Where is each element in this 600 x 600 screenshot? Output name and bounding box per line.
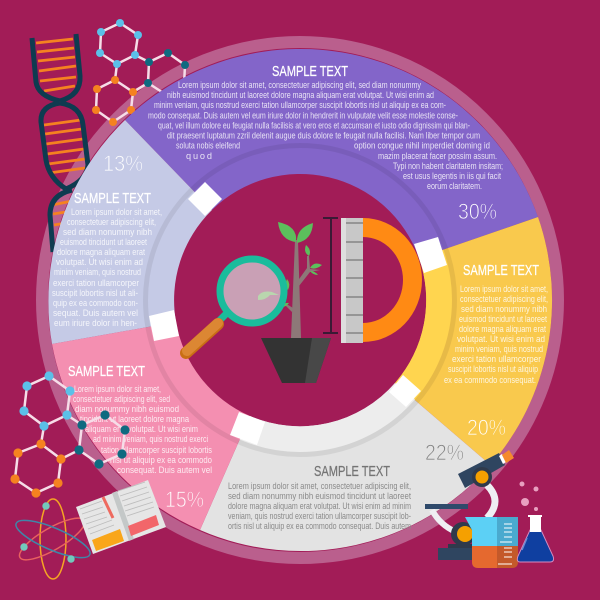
heading: purple: SAMPLE TEXT xyxy=(272,63,348,80)
percentage: 13%: 13% xyxy=(103,151,143,176)
icon: plant in pot xyxy=(261,222,331,383)
text block: yellow: suscipit lobortis nisl ut aliquip xyxy=(448,364,538,374)
outer ring xyxy=(42,42,558,558)
text block: pink: nisl ut aliquip ex ea commodo xyxy=(110,455,212,465)
text block: pink: diam nonummy nibh euismod xyxy=(75,404,179,414)
text block: pink: consequat. Duis autem vel xyxy=(117,465,212,475)
icon: open book xyxy=(76,480,166,554)
heading: yellow: SAMPLE TEXT xyxy=(463,262,539,279)
text block: purple: minim veniam, quis nostrud exerci tation ullamcorper suscipit lobortis nisl ut aliquip ex ea com- xyxy=(154,100,446,110)
panel: purple segment 30% xyxy=(125,49,538,258)
text block: pink: aliquam erat volutpat. Ut wisi enim xyxy=(85,424,198,434)
text block: purple: Typi non habent claritatem insitam; xyxy=(393,161,503,171)
text block: grey xyxy=(228,481,411,531)
text block: pale blue: suscipit lobortis nisl ut ali- xyxy=(52,288,138,298)
text block: pink: tincidunt ut laoreet dolore magna xyxy=(80,414,190,424)
text block: purple: eorum claritatem. xyxy=(427,181,482,191)
text block: yellow: minim veniam, quis nostrud xyxy=(455,344,543,354)
text block: yellow: volutpat. Ut wisi enim ad xyxy=(457,334,545,344)
icon: beaker xyxy=(465,517,518,568)
icon: magnifying glass xyxy=(186,259,284,353)
icon: molecule lower left xyxy=(10,371,130,498)
text block: yellow: Lorem ipsum dolor sit amet, xyxy=(460,284,548,294)
text block: yellow: ex ea commodo consequat. xyxy=(444,375,536,385)
text block: purple: q u o d xyxy=(186,151,212,161)
panel: yellow segment 20% xyxy=(395,217,552,465)
text block: pale blue: quip ex ea commodo con- xyxy=(53,298,138,308)
text block: yellow: sed diam nonummy nibh xyxy=(461,304,547,314)
text block: pale blue: exerci tation ullamcorper xyxy=(53,278,139,288)
text block: pink xyxy=(73,384,212,475)
percentage: 20%: 20% xyxy=(467,415,506,440)
text block: grey: veniam, quis nostrud exerci tation ullamcorper suscipit lob- xyxy=(228,511,411,521)
text block: pink: tation ullamcorper suscipit lobortis xyxy=(101,445,212,455)
percentage: 15%: 15% xyxy=(165,487,204,512)
text block: purple: nibh euismod tincidunt ut laoreet dolore magna aliquam erat volutpat. Ut wisi enim ad xyxy=(167,90,434,100)
icon: flask with bubbles xyxy=(517,482,554,562)
icon: ruler xyxy=(341,218,363,343)
plant pot xyxy=(261,338,331,383)
text block: purple: modo consequat. Duis autem vel eum iriure dolor in hendrerit in vulputate velit esse molestie conse- xyxy=(148,110,458,120)
text block: pink: ad minim veniam, quis nostrud exerci xyxy=(93,434,208,444)
text block: yellow: dolore magna aliquam erat xyxy=(459,324,546,334)
white connector markers xyxy=(149,182,447,445)
text block: grey: dolore magna aliquam erat volutpat. Ut wisi enim ad minim xyxy=(228,501,411,511)
text block: purple: soluta nobis eleifend xyxy=(176,140,240,150)
panel: pink segment 15% xyxy=(52,322,250,530)
text block: purple: Lorem ipsum dolor sit amet, consectetuer adipiscing elit, sed diam nonummy xyxy=(178,80,421,90)
text block: grey: sed diam nonummy nibh euismod tincidunt ut laoreet xyxy=(228,491,411,501)
heading: pale blue: SAMPLE TEXT xyxy=(74,190,151,207)
icon: atom xyxy=(12,499,94,579)
text block: purple: mazim placerat facer possim assum. xyxy=(378,151,497,161)
text block: pale blue: Lorem ipsum dolor sit amet, xyxy=(71,207,162,217)
text block: pale blue xyxy=(52,207,162,328)
text block: pale blue: euismod tincidunt ut laoreet xyxy=(60,237,147,247)
text block: yellow: euismod tincidunt ut laoreet xyxy=(459,314,547,324)
icon: microscope xyxy=(425,450,514,560)
text block: yellow: exerci tation ullamcorper xyxy=(452,354,541,364)
text block: pink: consectetuer adipiscing elit, sed xyxy=(73,394,170,404)
text block: pink: Lorem ipsum dolor sit amet, xyxy=(74,384,161,394)
icon: height measure bar xyxy=(323,218,338,333)
text block: grey: ortis nisl ut aliquip ex ea commodo consequat. Duis autem xyxy=(228,521,411,531)
icon: protractor xyxy=(363,218,422,342)
text block: pale blue: sed diam nonummy nibh xyxy=(63,227,152,237)
text block: purple: est usus legentis in iis qui facit xyxy=(403,171,501,181)
icon: molecule top xyxy=(92,19,189,126)
text block: pale blue: eum iriure dolor in hen- xyxy=(54,318,137,328)
text block: purple: dit praesent luptatum zzril delenit augue duis dolore te feugait nulla facilisi. Nam liber tempor cum xyxy=(167,130,480,140)
text block: pale blue: dolore magna aliquam erat xyxy=(57,247,145,257)
text block: yellow: consectetuer adipiscing elit, xyxy=(460,294,548,304)
text block: yellow xyxy=(444,284,548,385)
text block: purple xyxy=(148,80,503,191)
text block: pale blue: consectetuer adipiscing elit, xyxy=(67,217,156,227)
text block: grey: Lorem ipsum dolor sit amet, consectetuer adipiscing elit, xyxy=(228,481,411,491)
percentage: 22%: 22% xyxy=(425,440,464,465)
panel: grey segment 22% xyxy=(200,383,490,551)
heading: grey: SAMPLE TEXT xyxy=(314,463,390,480)
text block: pale blue: volutpat. Ut wisi enim ad xyxy=(56,257,143,267)
percentage: 30%: 30% xyxy=(458,199,497,224)
text block: pale blue: minim veniam, quis nostrud xyxy=(54,267,141,277)
text block: purple: quat, vel illum dolore eu feugiat nulla facilisis at vero eros et accumsan et iusto odio dignissim qui blan- xyxy=(158,120,470,130)
text block: pale blue: sequat. Duis autem vel xyxy=(53,308,138,318)
heading: pink: SAMPLE TEXT xyxy=(68,363,145,380)
panel: pale blue segment 13% xyxy=(48,120,212,344)
icon: DNA helix xyxy=(32,34,88,252)
text block: purple: option congue nihil imperdiet doming id xyxy=(354,140,490,150)
